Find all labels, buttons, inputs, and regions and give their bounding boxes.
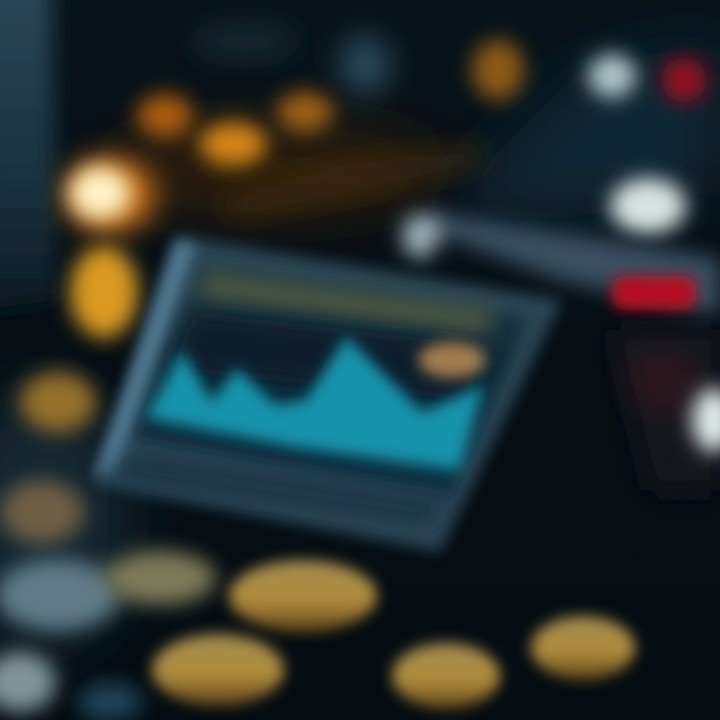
status lights at right <box>588 54 706 234</box>
coin: silver bottom left <box>0 652 56 712</box>
chart dark band <box>170 312 480 400</box>
background glow: lower left <box>0 390 130 650</box>
bokeh lights: amber <box>64 40 524 338</box>
coin: gold lower right <box>531 616 635 680</box>
light: white upper <box>588 54 636 98</box>
tablet body <box>94 236 562 552</box>
light: bright halo <box>64 157 156 233</box>
lower screen panel <box>115 452 445 526</box>
light: orange right <box>277 92 333 132</box>
highlight <box>402 214 438 258</box>
coin: pale middle <box>104 551 216 605</box>
dim shapes at top centre <box>190 24 391 95</box>
light: bright core <box>70 167 130 219</box>
area chart <box>146 336 484 470</box>
light: white centre <box>610 178 686 234</box>
coin: gold centre <box>229 560 377 632</box>
light: amber streak <box>220 145 490 218</box>
light: dim orange far right <box>472 40 524 100</box>
screen header band <box>198 272 495 336</box>
coin: blue bottom <box>78 682 142 720</box>
coin: gold lower left <box>152 634 284 706</box>
amber haze behind bokeh <box>100 125 440 215</box>
coin: silver left <box>0 559 120 631</box>
background glow: upper right <box>440 40 720 220</box>
dark device at lower right <box>610 330 720 490</box>
chart label <box>418 342 486 378</box>
white light at right edge <box>692 388 720 452</box>
light: yellow lower <box>70 246 138 338</box>
tablet <box>94 236 562 552</box>
blurred post at top left <box>0 0 56 310</box>
coins <box>0 372 635 720</box>
tablet screen <box>134 264 528 496</box>
coin: gold lower centre <box>392 643 500 709</box>
tablet left edge highlight <box>94 240 196 478</box>
coin: left middle <box>0 480 84 544</box>
light: red upper <box>662 58 706 102</box>
light: orange left <box>137 94 193 138</box>
light: orange centre <box>199 122 267 166</box>
red light on device <box>612 276 696 310</box>
device bar at right <box>402 212 720 316</box>
coin: left amber <box>20 372 96 432</box>
